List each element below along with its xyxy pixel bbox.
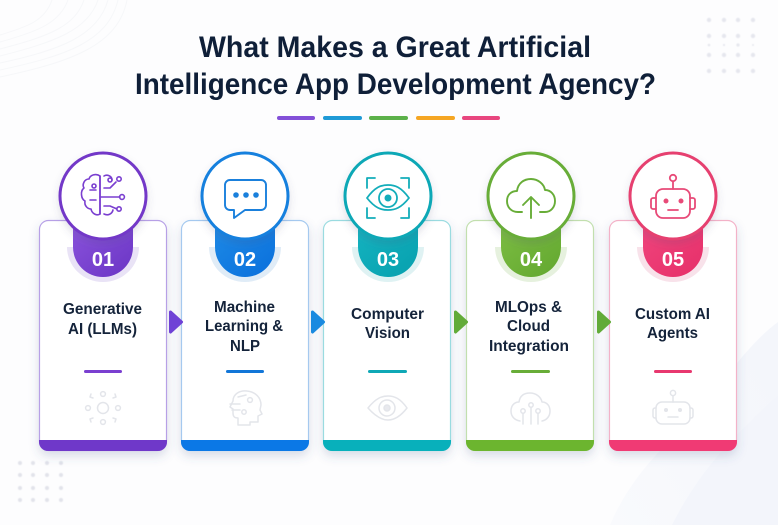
- panel: 02 Machine Learning & NLP: [181, 153, 309, 451]
- panel: 05 Custom AI Agents: [609, 153, 737, 451]
- icon circle: cloud upload: [488, 153, 574, 239]
- ghost icon: network: [86, 392, 120, 424]
- ghost icon: cloud network: [511, 393, 550, 424]
- arrow 4: [598, 312, 610, 332]
- bottom bar: [323, 440, 451, 451]
- decorative dots: bottom left: [18, 461, 63, 502]
- number badge: 01: [92, 249, 114, 271]
- label: Integration: [489, 338, 569, 355]
- label: Generative: [63, 301, 142, 318]
- title: [135, 31, 656, 101]
- card body: [466, 220, 594, 450]
- icon circle: chat: [202, 153, 288, 239]
- title: What Makes a Great Artificial: [199, 31, 591, 64]
- arrow 3: [456, 312, 466, 332]
- label: Learning &: [205, 318, 283, 335]
- icon circle: eye: [345, 153, 431, 239]
- card body: [182, 220, 308, 450]
- label: [635, 306, 710, 342]
- decorative dots: top right: [707, 18, 755, 73]
- ghost icon: AI head: [230, 391, 262, 425]
- panel: 03 Computer Vision: [323, 153, 451, 451]
- label: AI (LLMs): [68, 321, 137, 338]
- label: MLOps &: [495, 299, 562, 316]
- number badge: [209, 225, 281, 282]
- label: Cloud: [507, 318, 550, 335]
- label: Agents: [647, 325, 698, 342]
- title colour dashes: [277, 116, 500, 120]
- title: Intelligence App Development Agency?: [135, 68, 656, 101]
- label: NLP: [230, 338, 260, 355]
- number badge: [495, 225, 567, 282]
- card body: [324, 220, 450, 450]
- number badge: [352, 225, 424, 282]
- accent dash: [368, 370, 407, 373]
- card body: [610, 220, 736, 450]
- number badge: [637, 225, 709, 282]
- arrow 1: [170, 312, 182, 332]
- panel: 04 MLOps & Cloud Integration: [466, 153, 594, 451]
- label: Machine: [214, 299, 275, 316]
- number badge: 05: [662, 249, 684, 271]
- accent dash: [84, 370, 122, 373]
- label: Custom AI: [635, 306, 710, 323]
- bottom bar: [609, 440, 737, 451]
- label: [205, 299, 283, 355]
- arrow 2: [312, 312, 324, 332]
- number badge: 04: [520, 249, 543, 271]
- icon circle: brain: [60, 153, 146, 239]
- label: [489, 299, 569, 355]
- accent dash: [511, 370, 550, 373]
- accent dash: [226, 370, 264, 373]
- label: [63, 301, 142, 338]
- ghost icon: eye: [368, 396, 407, 420]
- label: Computer: [351, 306, 424, 323]
- bottom bar: [181, 440, 309, 451]
- icon circle: robot: [630, 153, 716, 239]
- label: Vision: [365, 325, 410, 342]
- number badge: 02: [234, 249, 256, 271]
- number badge: [67, 225, 139, 282]
- number badge: 03: [377, 249, 399, 271]
- bottom bar: [39, 440, 167, 451]
- ghost icon: robot: [653, 390, 693, 424]
- bottom bar: [466, 440, 594, 451]
- accent dash: [654, 370, 692, 373]
- panel: 01 Generative AI: [39, 153, 167, 451]
- card body: [40, 220, 166, 450]
- label: [351, 306, 424, 342]
